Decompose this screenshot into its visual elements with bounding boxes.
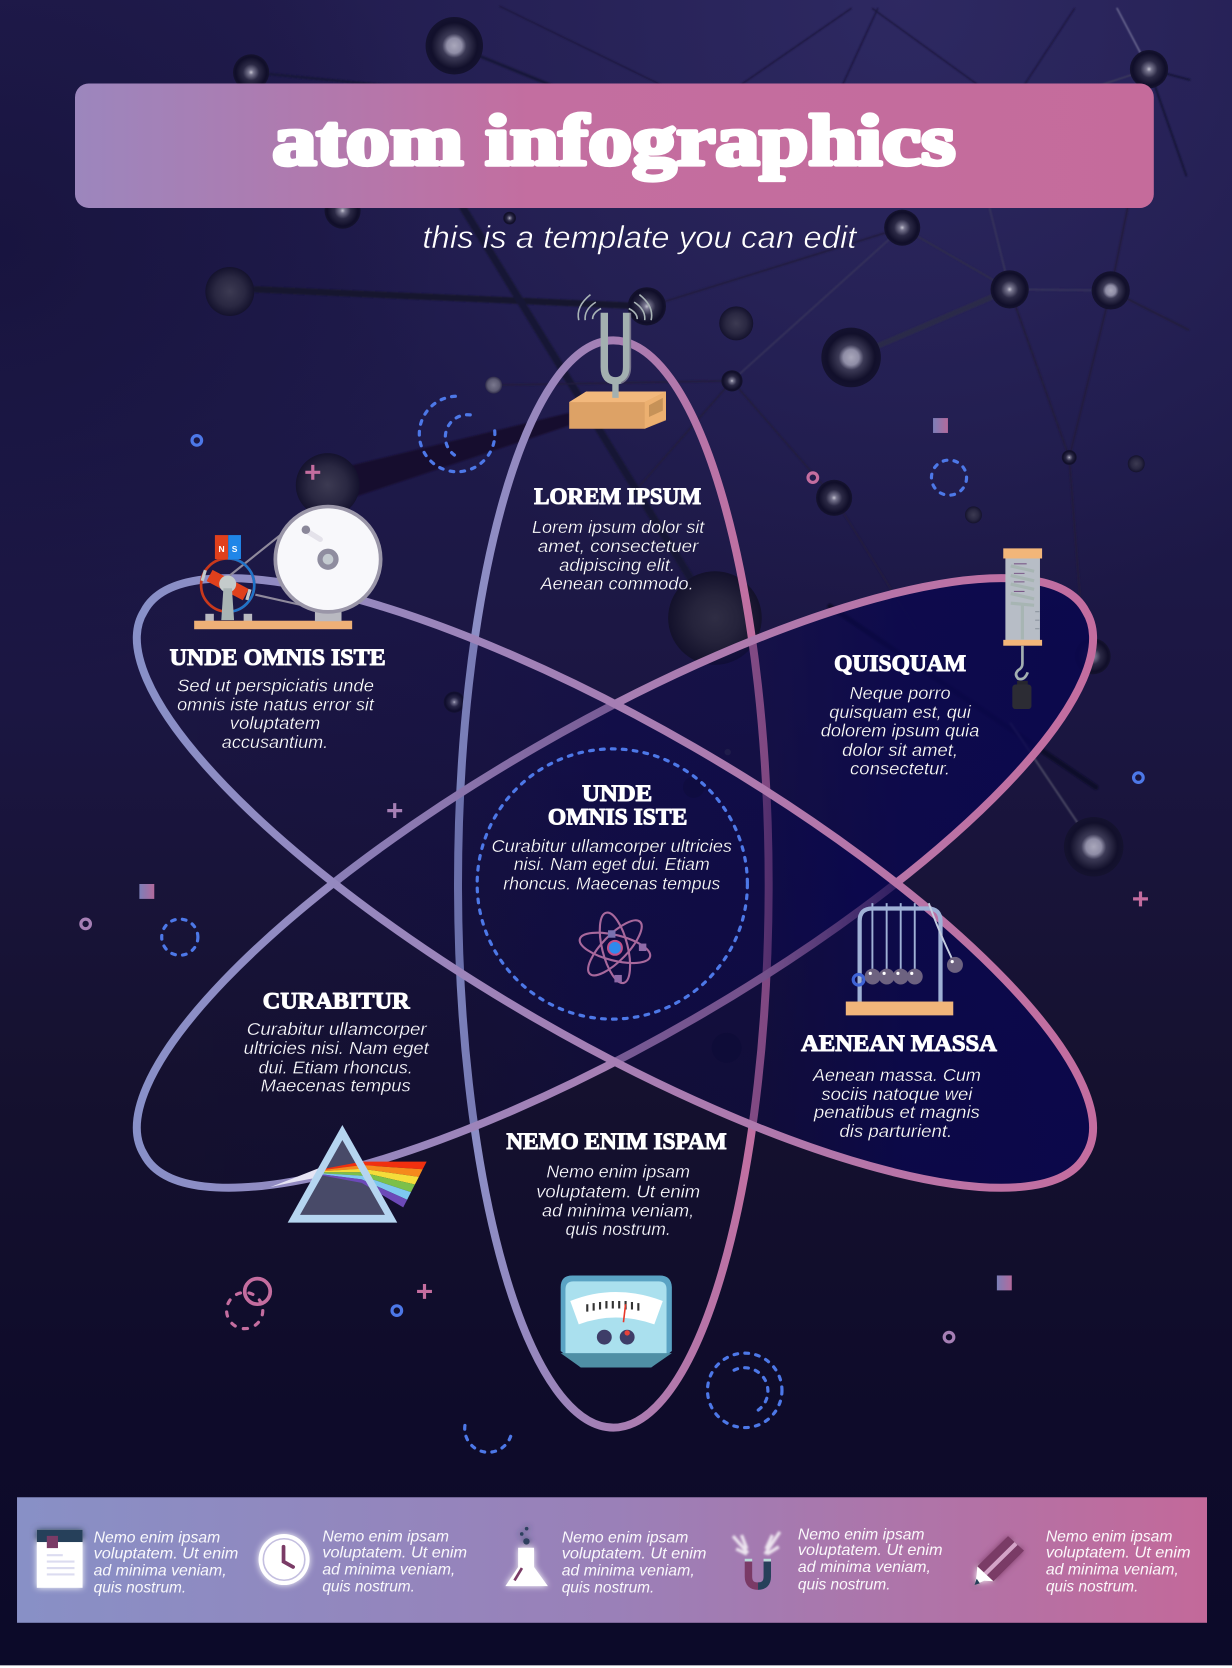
text: aenean massa: Aenean massa. Cum [812,1065,981,1085]
text: nemo enim ispam: voluptatem. Ut enim [536,1181,700,1201]
text: item 5: voluptatem. Ut enim [1046,1544,1191,1561]
text: curabitur: ultricies nisi. Nam eget [244,1038,430,1058]
center heading: UNDE [582,781,652,807]
text: item 2: quis nostrum. [322,1578,415,1595]
bottom band [17,1497,1207,1623]
text: curabitur: Maecenas tempus [261,1075,411,1095]
text: quisquam: quisquam est, qui [829,702,972,722]
text: unde omnis iste left: voluptatem [230,713,320,733]
text: item 3: Nemo enim ipsam [562,1529,688,1546]
text: lorem ipsum: LOREM IPSUM [534,484,701,510]
text: item 1: ad minima veniam, [94,1562,227,1579]
text: item 2: Nemo enim ipsam [322,1528,449,1545]
text: curabitur: CURABITUR [263,988,411,1014]
text: nemo enim ispam: Nemo enim ipsam [546,1162,690,1182]
text: curabitur: Curabitur ullamcorper [247,1019,428,1039]
icon: magnet [733,1532,780,1586]
text: quisquam: Neque porro [850,683,951,703]
text: item 1: quis nostrum. [94,1579,186,1596]
text: curabitur [244,988,430,1095]
icon: clock [259,1534,310,1585]
text: item 1: voluptatem. Ut enim [94,1545,238,1562]
icon: atom [577,910,653,986]
center heading: OMNIS ISTE [548,804,687,830]
molecule network backdrop [205,6,1189,1063]
text: item 5: Nemo enim ipsam [1046,1528,1172,1545]
text: quisquam: dolor sit amet, [842,740,958,760]
text: nemo enim ispam: quis nostrum. [565,1219,671,1239]
text: quisquam: QUISQUAM [834,651,966,677]
icon: pencil [975,1536,1024,1585]
text: item 1 [94,1529,238,1596]
center body text: Curabitur ullamcorper ultricies [492,836,732,856]
text: quisquam: consectetur. [850,758,950,778]
center heading [548,781,687,830]
text: item 2: ad minima veniam, [322,1561,455,1578]
text: item 3 [562,1529,706,1596]
text: nemo enim ispam [506,1129,727,1239]
text: item 2: voluptatem. Ut enim [322,1544,467,1561]
icon: electrostatic generator [194,507,381,629]
decorative shapes [81,396,1148,1452]
text: item 4: Nemo enim ipsam [798,1526,925,1543]
text: lorem ipsum: Lorem ipsum dolor sit [532,517,705,537]
center circle panel [477,749,747,1019]
text: item 4: quis nostrum. [798,1576,890,1593]
text: item 4: ad minima veniam, [798,1559,931,1576]
text: item 3: voluptatem. Ut enim [562,1545,706,1562]
text: curabitur: dui. Etiam rhoncus. [259,1057,413,1077]
orbit: tilted ellipse, lower-left to upper-right [137,578,1093,1188]
text: item 1: Nemo enim ipsam [94,1529,220,1546]
text: item 2 [322,1528,467,1595]
text: item 3: ad minima veniam, [562,1562,695,1579]
icon: electrostatic generator: N [219,544,225,554]
text: nemo enim ispam: NEMO ENIM ISPAM [506,1129,727,1155]
title banner: atom infographics [272,100,955,180]
text: lorem ipsum: amet, consectetuer [538,536,700,556]
text: aenean massa: AENEAN MASSA [801,1031,997,1057]
text: unde omnis iste left: accusantium. [222,732,328,752]
text: lorem ipsum: Aenean commodo. [539,573,694,593]
icon: spring scale [1003,548,1042,709]
icon: flask [505,1527,548,1586]
center body text: nisi. Nam eget dui. Etiam [514,854,710,874]
text: item 5: ad minima veniam, [1046,1561,1179,1578]
text: aenean massa: penatibus et magnis [813,1102,980,1122]
orbit: vertical ellipse [458,340,769,1428]
text: unde omnis iste left: UNDE OMNIS ISTE [170,645,386,671]
text: aenean massa: dis parturient. [839,1121,952,1141]
text: item 5 [1046,1528,1191,1595]
text: item 5: quis nostrum. [1046,1578,1138,1595]
text: item 3: quis nostrum. [562,1579,654,1596]
icon: electrostatic generator: S [232,544,238,554]
text: nemo enim ispam: ad minima veniam, [542,1200,694,1220]
icon: prism with rainbow [270,1125,427,1223]
title banner [75,84,1154,208]
orbit: tilted ellipse, upper-left to lower-right [137,578,1093,1188]
center body text: rhoncus. Maecenas tempus [503,873,720,893]
icon: analog meter [561,1275,672,1367]
center body text [492,836,732,893]
text: unde omnis iste left: Sed ut perspiciatis unde [177,675,374,695]
text: quisquam [821,651,980,778]
text: aenean massa [801,1031,997,1141]
text: lorem ipsum [532,484,705,593]
text: unde omnis iste left [170,645,386,752]
text: quisquam: dolorem ipsum quia [821,721,980,741]
icon: tuning fork [569,295,666,429]
subtitle: this is a template you can edit [422,219,858,255]
text: item 4: voluptatem. Ut enim [798,1542,943,1559]
icon: Newton's cradle [846,903,963,1015]
text: aenean massa: sociis natoque wei [821,1084,974,1104]
icon: document [37,1530,83,1588]
text: item 4 [798,1526,943,1593]
text: lorem ipsum: adipiscing elit. [559,555,675,575]
text: unde omnis iste left: omnis iste natus error sit [177,695,375,715]
